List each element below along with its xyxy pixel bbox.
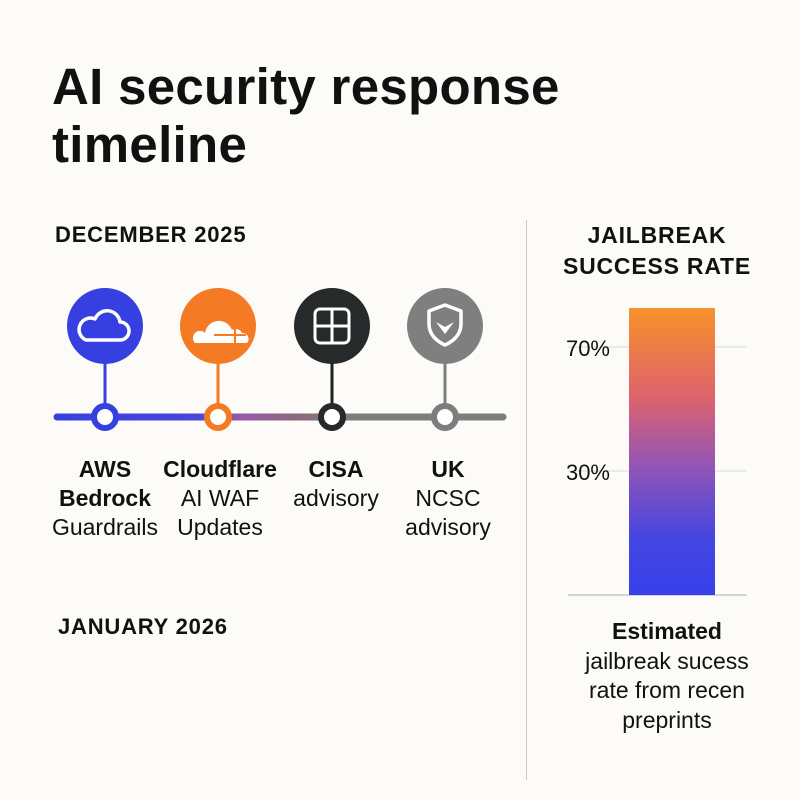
caption — [584, 618, 749, 733]
label: UK: NCSC — [415, 485, 481, 511]
label: AWS: Guardrails — [52, 514, 158, 540]
caption: Estimated — [612, 618, 722, 644]
caption: rate from recen — [589, 677, 745, 703]
title — [52, 58, 560, 173]
label: AWS: Bedrock — [59, 485, 151, 511]
heading: jailbreak success rate — [563, 222, 751, 279]
label: UK: advisory — [405, 514, 491, 540]
bar chart: 30% — [566, 460, 610, 485]
caption: jailbreak sucess — [585, 648, 749, 674]
divider — [526, 220, 527, 780]
milestone: Cloudflare — [180, 288, 256, 428]
label: Cloudflare: Updates — [177, 514, 263, 540]
label: CISA — [293, 456, 379, 511]
label: Cloudflare: AI WAF — [181, 485, 259, 511]
bar chart: 70% — [566, 336, 610, 361]
milestone: AWS — [67, 288, 143, 428]
title: timeline — [52, 116, 247, 173]
timeline chart — [54, 288, 506, 431]
label: UK: UK — [431, 456, 465, 482]
heading: January 2026: JANUARY 2026 — [58, 614, 228, 639]
bar chart — [566, 308, 747, 596]
label: CISA: advisory — [293, 485, 379, 511]
label: UK — [405, 456, 491, 540]
caption: preprints — [622, 706, 712, 732]
heading: jailbreak success rate: SUCCESS RATE — [563, 253, 751, 279]
heading: jailbreak success rate: JAILBREAK — [588, 222, 726, 248]
label: Cloudflare — [163, 456, 277, 540]
milestone: UK NCSC — [407, 288, 483, 428]
label: AWS: AWS — [79, 456, 131, 482]
title: AI security response — [52, 58, 560, 115]
milestone: CISA — [294, 288, 370, 428]
label: Cloudflare: Cloudflare — [163, 456, 277, 482]
heading: December 2025: DECEMBER 2025 — [55, 222, 246, 247]
label: AWS — [52, 456, 158, 540]
label: CISA: CISA — [309, 456, 363, 482]
